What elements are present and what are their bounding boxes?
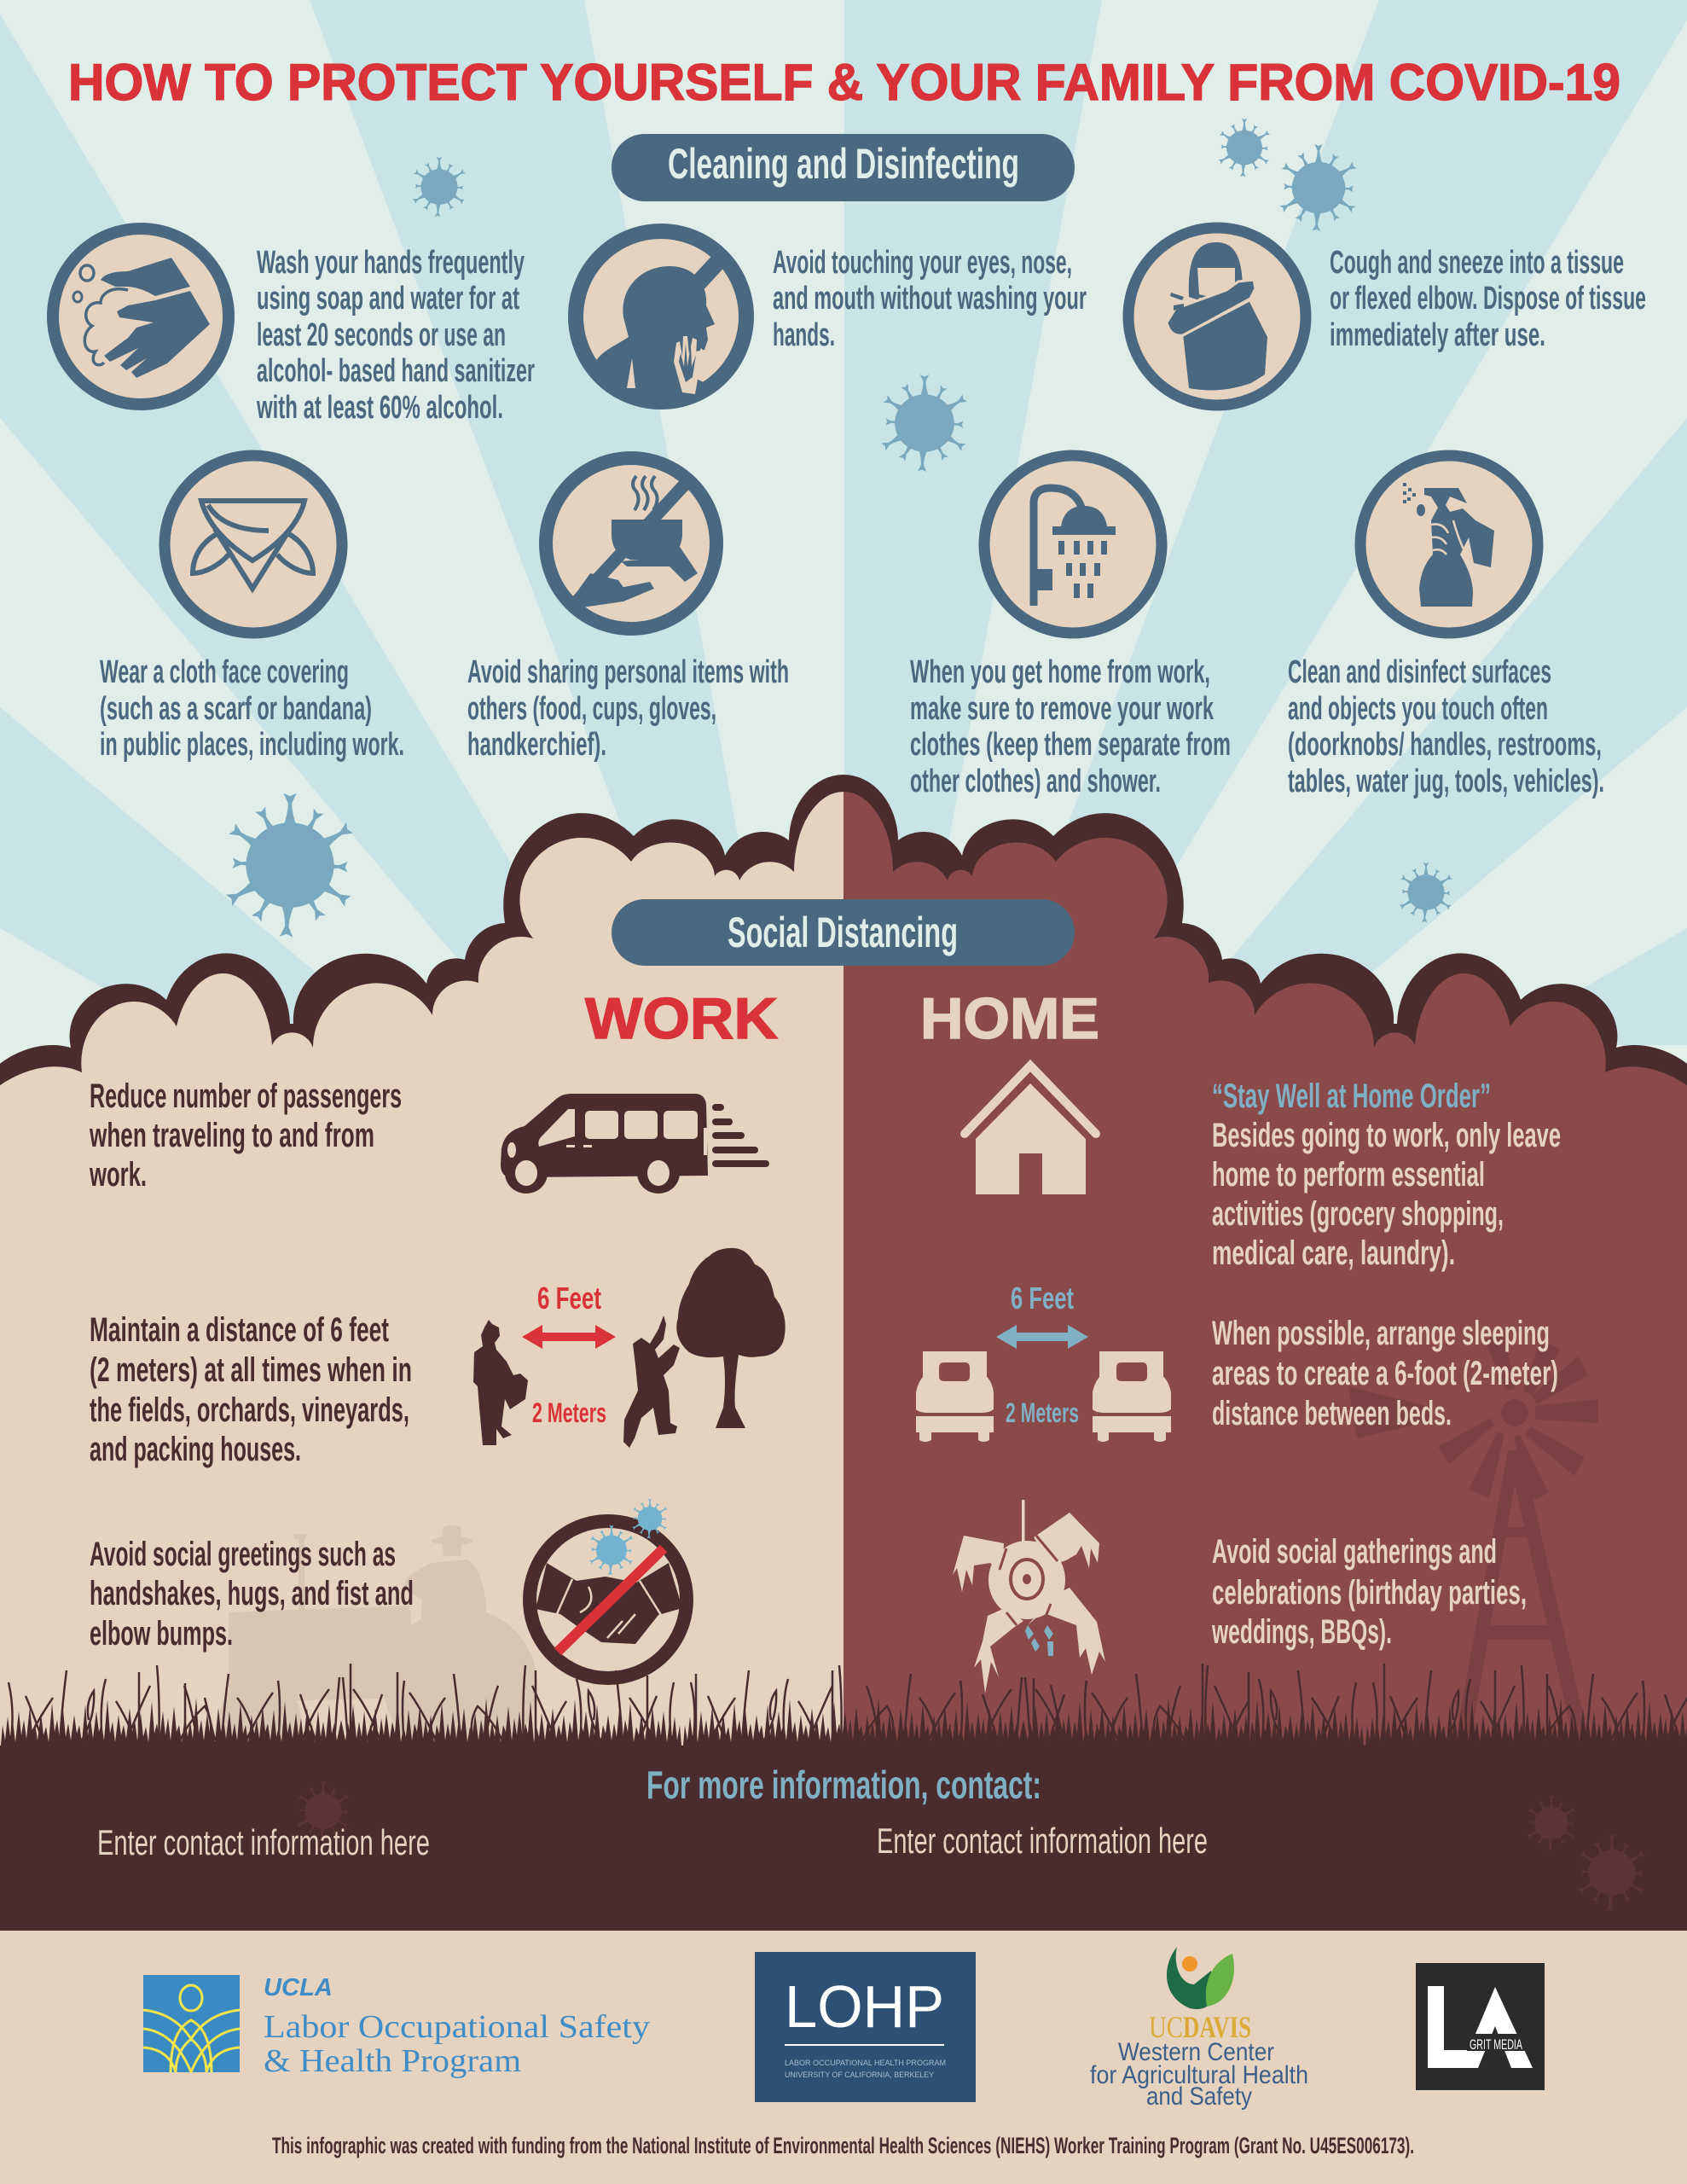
- text: avoid sharing: Avoid sharing personal items with: [467, 654, 789, 690]
- text: maintain distance: Maintain a distance of 6 feet: [90, 1311, 389, 1349]
- icon: pinata: [953, 1500, 1105, 1693]
- icon: shower: [984, 456, 1162, 633]
- logo: UCLA LOSH: UCLA: [264, 1974, 333, 2001]
- diagram: workers six feet apart: [473, 1248, 786, 1448]
- logo: UC Davis Western Center: [1090, 1947, 1308, 2111]
- text: wash hands: Wash your hands frequently: [257, 245, 525, 281]
- text: wash hands: [256, 245, 535, 426]
- text: shower after work: [910, 654, 1231, 799]
- icon: hand washing: [53, 229, 229, 404]
- text: shower after work: clothes (keep them separate from: [910, 727, 1231, 763]
- text: wash hands: alcohol- based hand sanitizer: [257, 353, 535, 389]
- text: stay well at home: [1212, 1077, 1561, 1272]
- diagram: beds six feet apart: 6 Feet: [1011, 1281, 1074, 1316]
- text: reduce passengers: work.: [89, 1156, 147, 1194]
- text: wash hands: least 20 seconds or use an: [257, 317, 506, 353]
- icon: house: [965, 1066, 1096, 1194]
- logo: UC Davis Western Center: and Safety: [1146, 2082, 1252, 2111]
- diagram: workers six feet apart: 2 Meters: [532, 1397, 606, 1428]
- heading: HOME: HOME: [920, 986, 1099, 1051]
- watermark: farmer on tractor: [219, 1525, 537, 1762]
- text: cough and sneeze: [1330, 245, 1646, 353]
- logo: LOHP: LABOR OCCUPATIONAL HEALTH PROGRAM: [785, 2059, 946, 2068]
- text: wash hands: with at least 60% alcohol.: [256, 390, 503, 426]
- title: HOW TO PROTECT YOURSELF & YOUR FAMILY FROM COVID-19: [68, 54, 1620, 111]
- text: maintain distance: and packing houses.: [90, 1431, 301, 1468]
- text: avoid social greetings: elbow bumps.: [90, 1615, 233, 1653]
- text: reduce passengers: Reduce number of passengers: [90, 1077, 402, 1115]
- text: cloth face covering: in public places, including work.: [100, 727, 404, 763]
- logo: LA Grit Media: [1416, 1963, 1545, 2090]
- text: maintain distance: [90, 1311, 412, 1468]
- text: stay well at home: medical care, laundry).: [1212, 1234, 1455, 1272]
- logo: UC Davis Western Center: DAVIS: [1183, 2010, 1251, 2044]
- text: avoid social gatherings: Avoid social gatherings and: [1212, 1533, 1497, 1571]
- text: clean and disinfect: [1288, 654, 1604, 799]
- logo: UC Davis Western Center: for Agricultural Health: [1090, 2061, 1308, 2089]
- logo: LOHP: LOHP: [785, 1973, 944, 2040]
- logo: UCLA LOSH: [143, 1974, 650, 2079]
- text: avoid sharing: handkerchief).: [467, 727, 606, 763]
- text: stay well at home: “Stay Well at Home Order”: [1212, 1077, 1491, 1115]
- watermark: windmill: [1348, 1333, 1598, 1751]
- text: avoid touching: and mouth without washing your: [773, 281, 1087, 317]
- faint viruses on ground: [296, 1781, 1646, 1911]
- logo: UC Davis Western Center: UC: [1149, 2010, 1183, 2044]
- text: arrange sleeping areas: distance between beds.: [1212, 1395, 1452, 1432]
- text: avoid sharing: others (food, cups, gloves,: [467, 691, 716, 727]
- text: avoid social gatherings: [1211, 1533, 1527, 1651]
- logo: UCLA LOSH: & Health Program: [264, 2043, 521, 2079]
- text: cloth face covering: (such as a scarf or bandana): [100, 691, 372, 727]
- contact heading: For more information, contact:: [646, 1763, 1041, 1807]
- icon: do not touch face: [576, 231, 746, 407]
- icon: no handshakes: [530, 1498, 687, 1678]
- heading pill: Social Distancing: Social Distancing: [728, 909, 958, 956]
- text: avoid social gatherings: celebrations (birthday parties,: [1212, 1574, 1527, 1612]
- text: shower after work: make sure to remove your work: [910, 691, 1215, 727]
- panel: footer band: [0, 1931, 1687, 2184]
- panel: cloud outline: [0, 775, 1687, 1194]
- logo: LOHP: [755, 1952, 976, 2102]
- text: cloth face covering: Wear a cloth face covering: [100, 654, 349, 690]
- text: cough and sneeze: immediately after use.: [1330, 317, 1545, 353]
- text: shower after work: When you get home from work,: [910, 654, 1210, 690]
- diagram: beds six feet apart: [916, 1281, 1171, 1442]
- panel: work side: [0, 792, 844, 1809]
- text: stay well at home: activities (grocery shopping,: [1212, 1195, 1504, 1233]
- ground: grass silhouette: [0, 1664, 1687, 1931]
- text: avoid social greetings: [90, 1536, 414, 1653]
- icon: cough into elbow: [1128, 228, 1306, 405]
- heading: WORK: WORK: [585, 986, 778, 1051]
- text: avoid touching: hands.: [773, 317, 835, 353]
- text: shower after work: other clothes) and shower.: [910, 764, 1161, 799]
- diagram: beds six feet apart: 2 Meters: [1006, 1397, 1079, 1428]
- icon: bandana face covering: [165, 456, 342, 633]
- heading pill: Cleaning and Disinfecting: [612, 134, 1075, 201]
- text: reduce passengers: when traveling to and from: [89, 1117, 374, 1154]
- text: avoid sharing: [467, 654, 789, 763]
- contact placeholder left: Enter contact information here: [97, 1822, 430, 1862]
- logo: UCLA LOSH: Labor Occupational Safety: [264, 2009, 650, 2045]
- text: avoid social greetings: handshakes, hugs, and fist and: [90, 1575, 414, 1612]
- text: wash hands: using soap and water for at: [257, 281, 519, 317]
- icon: van: [501, 1094, 769, 1194]
- diagram: workers six feet apart: 6 Feet: [537, 1281, 601, 1316]
- logo: LOHP: UNIVERSITY OF CALIFORNIA, BERKELEY: [785, 2071, 935, 2080]
- text: reduce passengers: [89, 1077, 402, 1194]
- logo: UC Davis Western Center: Western Center: [1118, 2038, 1274, 2066]
- text: arrange sleeping areas: [1212, 1315, 1558, 1432]
- text: avoid social greetings: Avoid social greetings such as: [90, 1536, 396, 1573]
- text: cloth face covering: [100, 654, 404, 763]
- text: stay well at home: home to perform essential: [1212, 1156, 1485, 1194]
- text: maintain distance: the fields, orchards, vineyards,: [90, 1391, 409, 1429]
- contact placeholder right: Enter contact information here: [877, 1821, 1208, 1861]
- text: maintain distance: (2 meters) at all times when in: [90, 1351, 412, 1389]
- text: avoid touching: [773, 245, 1087, 353]
- text: avoid social gatherings: weddings, BBQs).: [1211, 1613, 1392, 1651]
- decorative viruses in sky: [226, 119, 1452, 938]
- background: sunburst rays: [0, 0, 1687, 1416]
- heading pill: Social Distancing: [612, 899, 1075, 966]
- text: avoid touching: Avoid touching your eyes, nose,: [773, 245, 1072, 281]
- heading pill: Cleaning and Disinfecting: Cleaning and Disinfecting: [668, 140, 1019, 188]
- logo: LA Grit Media: GRIT MEDIA: [1470, 2036, 1522, 2053]
- icon: spray bottle: [1360, 456, 1538, 633]
- icon: do not share items: [546, 458, 716, 629]
- panel: home side: [844, 792, 1687, 1809]
